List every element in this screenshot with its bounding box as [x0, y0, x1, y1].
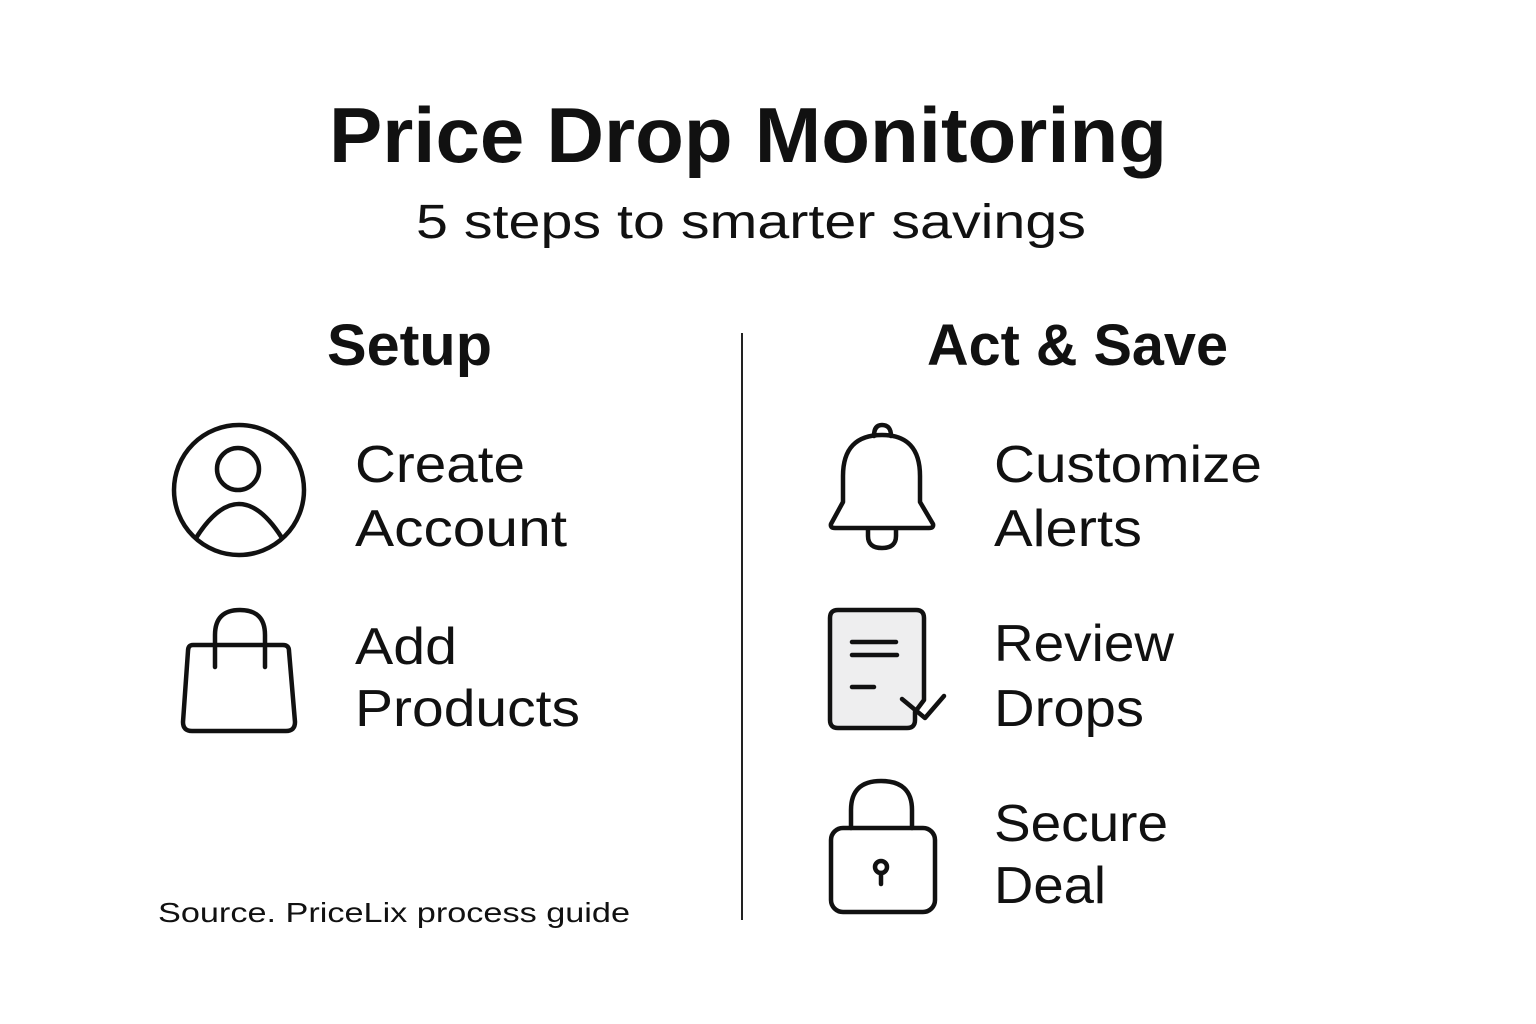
step: Review Drops: Review [994, 615, 1174, 673]
step: Customize Alerts: Customize [994, 436, 1262, 494]
step: Add Products [355, 618, 580, 738]
source note: Source. PriceLix process guide [158, 897, 630, 928]
step: Secure Deal: Deal [994, 857, 1106, 915]
step: Create Account [355, 436, 568, 558]
step: Add Products: Products [355, 680, 580, 738]
step: Review Drops [994, 615, 1174, 738]
step: Secure Deal [994, 795, 1168, 915]
title: Price Drop Monitoring [329, 91, 1167, 179]
step: Customize Alerts: Alerts [994, 500, 1142, 558]
heading: Setup: Setup [327, 313, 492, 378]
step: Add Products: Add [355, 618, 457, 676]
subtitle: 5 steps to smarter savings [416, 196, 1086, 249]
step: Secure Deal: Secure [994, 795, 1168, 853]
step: Create Account: Create [355, 436, 525, 494]
heading: Act & Save: Act & Save [927, 313, 1228, 378]
step: Review Drops: Drops [994, 680, 1144, 738]
icon: bell [831, 425, 933, 548]
icon: document with check [830, 610, 944, 728]
step: Create Account: Account [355, 500, 568, 558]
icon: lock [831, 781, 935, 912]
step: Customize Alerts [994, 436, 1262, 558]
icon: user [174, 425, 304, 555]
icon: shopping bag [183, 610, 295, 731]
divider [741, 333, 743, 920]
